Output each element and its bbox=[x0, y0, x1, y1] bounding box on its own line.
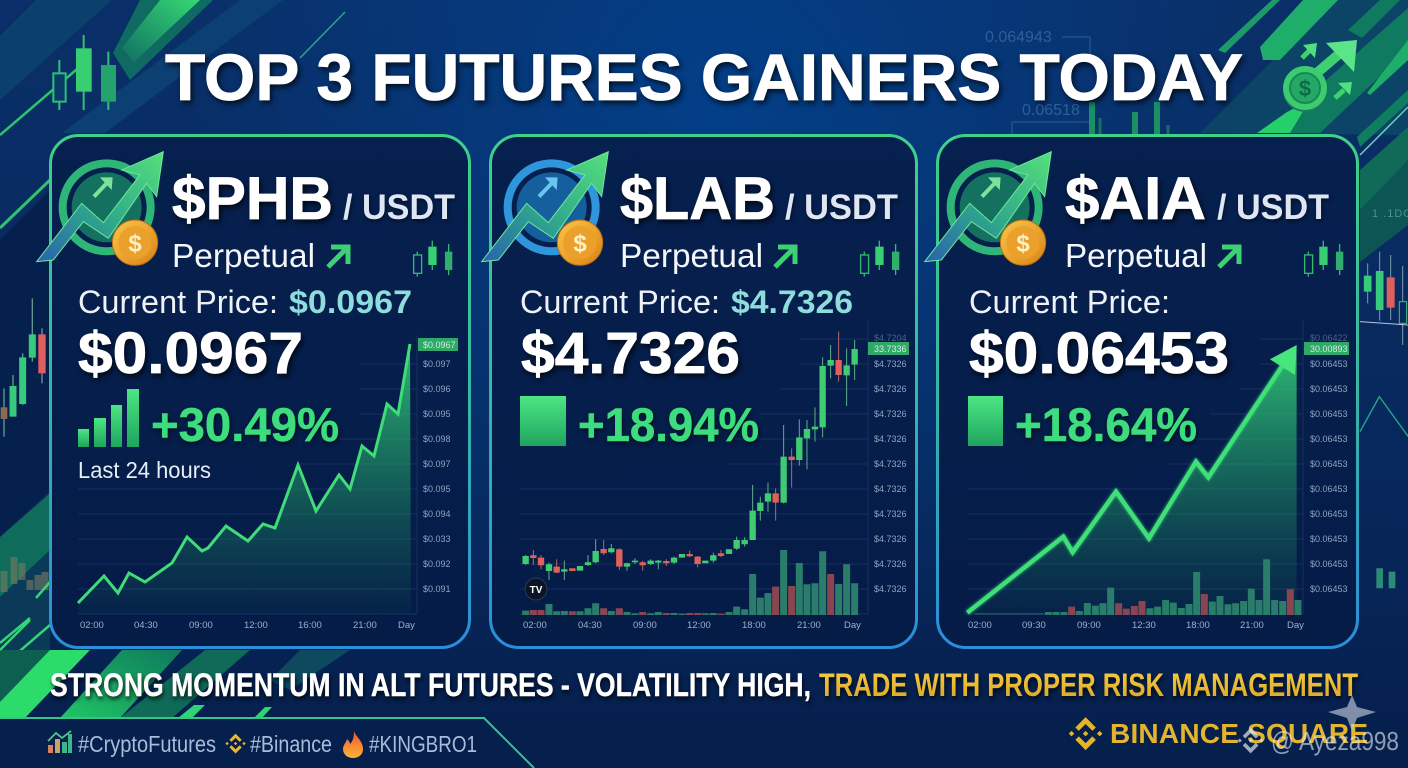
chart: PHB line: $0.096 bbox=[423, 384, 451, 394]
percent change: +18.64% bbox=[1015, 398, 1197, 451]
watermark bbox=[1238, 695, 1399, 756]
icon: small candles bbox=[414, 241, 452, 277]
chart: AIA arrow line: 30.00893 bbox=[1310, 344, 1348, 354]
icon: green bars bbox=[78, 389, 139, 447]
percent change: +18.94% bbox=[578, 398, 759, 451]
icon: small candles bbox=[861, 241, 899, 277]
binance square logo: BINANCE SQUARE bbox=[1110, 718, 1368, 749]
ticker: $LAB bbox=[620, 165, 775, 232]
chart: PHB line: 12:00 bbox=[244, 620, 268, 631]
chart: PHB line bbox=[78, 335, 458, 631]
chart: AIA arrow line: $0.06453 bbox=[1310, 509, 1348, 519]
chart: AIA arrow line: $0.06453 bbox=[1310, 409, 1348, 419]
current price line: Current Price: bbox=[78, 284, 278, 320]
panel: LAB bbox=[482, 136, 916, 648]
icon: coin with rising arrows top-right: $ bbox=[1299, 76, 1311, 101]
chart: PHB line: $0.095 bbox=[423, 484, 451, 494]
big price: $4.7326 bbox=[521, 321, 740, 386]
chart: AIA arrow line: 18:00 bbox=[1186, 620, 1210, 631]
chart: LAB candlesticks: $4.7326 bbox=[874, 534, 907, 544]
chart: AIA arrow line: $0.06453 bbox=[1310, 559, 1348, 569]
faded background price labels and candles behind title: 0.064943 bbox=[985, 29, 1052, 46]
big price: $0.06453 bbox=[969, 321, 1229, 386]
icon: small arrow bbox=[1219, 247, 1239, 267]
chart: LAB candlesticks: 09:00 bbox=[633, 620, 657, 631]
chart: LAB candlesticks: $4.7326 bbox=[874, 459, 907, 469]
chart: AIA arrow line: 02:00 bbox=[968, 620, 992, 631]
chart: PHB line: 09:00 bbox=[189, 620, 213, 631]
card frame bbox=[50, 136, 470, 648]
pair: / USDT bbox=[785, 188, 898, 227]
icon: rising arrow with coin bbox=[925, 152, 1051, 265]
icon: rising arrow with coin: $ bbox=[573, 230, 587, 257]
chart: AIA arrow line: $0.06453 bbox=[1310, 584, 1348, 594]
chart: PHB line: Day bbox=[398, 620, 415, 631]
icon: green square bbox=[520, 396, 566, 446]
top-left diagonal green bands bbox=[0, 0, 345, 228]
chart: LAB candlesticks: 33.7336 bbox=[874, 344, 907, 354]
icon: small arrow bbox=[775, 247, 795, 267]
current price line: $4.7326 bbox=[731, 284, 853, 320]
icon: small candles bbox=[1305, 241, 1343, 277]
pair: / USDT bbox=[343, 188, 455, 227]
current price line bbox=[520, 284, 853, 320]
chart: PHB line: 21:00 bbox=[353, 620, 377, 631]
chart: AIA arrow line: 09:00 bbox=[1077, 620, 1101, 631]
top-right diagonal green bands bbox=[1200, 0, 1408, 262]
tagline: STRONG MOMENTUM IN ALT FUTURES - VOLATILITY HIGH, bbox=[50, 667, 811, 703]
chart: PHB line: 04:30 bbox=[134, 620, 158, 631]
chart: PHB line: 16:00 bbox=[298, 620, 322, 631]
chart: LAB candlesticks: $4.7204 bbox=[874, 333, 907, 343]
chart: PHB line: 02:00 bbox=[80, 620, 104, 631]
bottom-left diagonal green bands bbox=[0, 620, 350, 718]
hashtag strip: #CryptoFutures bbox=[78, 731, 216, 757]
chart: LAB candlesticks: $4.7326 bbox=[874, 584, 907, 594]
title: TOP 3 FUTURES GAINERS TODAY bbox=[165, 40, 1243, 114]
chart: LAB candlesticks bbox=[520, 320, 909, 631]
chart: LAB candlesticks: TV bbox=[530, 585, 543, 596]
chart: LAB candlesticks: 12:00 bbox=[687, 620, 711, 631]
chart: PHB line: $0.098 bbox=[423, 434, 451, 444]
chart: PHB line: $0.0967 bbox=[423, 340, 456, 350]
chart: PHB line: $0.097 bbox=[423, 359, 451, 369]
chart: LAB candlesticks: 18:00 bbox=[742, 620, 766, 631]
icon: small arrow bbox=[328, 247, 348, 267]
chart: AIA arrow line: $0.06453 bbox=[1310, 434, 1348, 444]
chart: AIA arrow line: $0.06453 bbox=[1310, 534, 1348, 544]
chart: AIA arrow line: $0.06422 bbox=[1310, 333, 1348, 343]
chart: PHB line: $0.033 bbox=[423, 534, 451, 544]
chart: LAB candlesticks: $4.7326 bbox=[874, 559, 907, 569]
perpetual label: Perpetual bbox=[620, 237, 763, 274]
left edge candlesticks bbox=[4, 298, 42, 437]
chart: LAB candlesticks: 21:00 bbox=[797, 620, 821, 631]
chart: AIA arrow line: 12:30 bbox=[1132, 620, 1156, 631]
chart: PHB line: $0.095 bbox=[423, 409, 451, 419]
icon: green block bbox=[968, 396, 1003, 446]
hashtag strip bbox=[0, 718, 534, 768]
current price line: Current Price: bbox=[520, 284, 720, 320]
chart: LAB candlesticks: 02:00 bbox=[523, 620, 547, 631]
icon: flame bbox=[343, 731, 363, 758]
ticker: $AIA bbox=[1065, 165, 1206, 232]
icon: binance diamond bbox=[225, 734, 246, 753]
hashtag strip: #Binance bbox=[250, 731, 332, 757]
current price line: Current Price: bbox=[969, 284, 1170, 320]
chart: LAB candlesticks: $4.7326 bbox=[874, 359, 907, 369]
chart: AIA arrow line: $0.06453 bbox=[1310, 384, 1348, 394]
icon: coin with rising arrows top-right bbox=[1283, 40, 1357, 112]
icon: candlesticks top-left bbox=[53, 35, 116, 110]
card frame bbox=[490, 136, 916, 648]
pair: / USDT bbox=[1217, 188, 1329, 227]
icon: rising arrow with coin: $ bbox=[1016, 230, 1030, 257]
chart: LAB candlesticks: Day bbox=[844, 620, 861, 631]
panel: AIA bbox=[925, 136, 1358, 648]
left edge green band with faded bars bbox=[0, 493, 50, 668]
big price: $0.0967 bbox=[78, 321, 303, 386]
chart: PHB line: $0.091 bbox=[423, 584, 451, 594]
icon: chart bbox=[48, 731, 72, 753]
chart: LAB candlesticks: $4.7326 bbox=[874, 484, 907, 494]
chart: LAB candlesticks: $4.7326 bbox=[874, 509, 907, 519]
chart: PHB line: $0.097 bbox=[423, 459, 451, 469]
period: Last 24 hours bbox=[78, 457, 211, 483]
chart: LAB candlesticks: 04:30 bbox=[578, 620, 602, 631]
chart: AIA arrow line: $0.06453 bbox=[1310, 484, 1348, 494]
faded background price labels and candles behind title: 0.06518 bbox=[1022, 102, 1080, 119]
chart: LAB candlesticks: $4.7326 bbox=[874, 434, 907, 444]
chart: LAB candlesticks: $4.7326 bbox=[874, 409, 907, 419]
icon: rising arrow with coin bbox=[37, 152, 163, 265]
right edge candlesticks and line chart bbox=[1360, 252, 1408, 588]
chart: AIA arrow line: 21:00 bbox=[1240, 620, 1264, 631]
percent change: +30.49% bbox=[151, 398, 339, 451]
perpetual label: Perpetual bbox=[172, 237, 315, 274]
chart: AIA arrow line: $0.06453 bbox=[1310, 459, 1348, 469]
chart: AIA arrow line: 09:30 bbox=[1022, 620, 1046, 631]
icon: rising arrow with coin: $ bbox=[128, 230, 142, 257]
ticker: $PHB bbox=[172, 165, 333, 232]
faded background price labels and candles behind title bbox=[985, 29, 1408, 220]
card frame bbox=[938, 136, 1358, 648]
chart: PHB line: $0.092 bbox=[423, 559, 451, 569]
chart: AIA arrow line: $0.06453 bbox=[1310, 359, 1348, 369]
hashtag strip: #KINGBRO1 bbox=[369, 731, 477, 757]
current price line bbox=[78, 284, 412, 320]
chart: AIA arrow line bbox=[967, 320, 1349, 631]
current price line: $0.0967 bbox=[289, 284, 412, 320]
chart: AIA arrow line: Day bbox=[1287, 620, 1304, 631]
icon: rising arrow with coin bbox=[482, 152, 608, 265]
chart: LAB candlesticks: $4.7326 bbox=[874, 384, 907, 394]
chart: PHB line: $0.094 bbox=[423, 509, 451, 519]
panel: PHB bbox=[37, 136, 470, 648]
perpetual label: Perpetual bbox=[1065, 237, 1207, 274]
